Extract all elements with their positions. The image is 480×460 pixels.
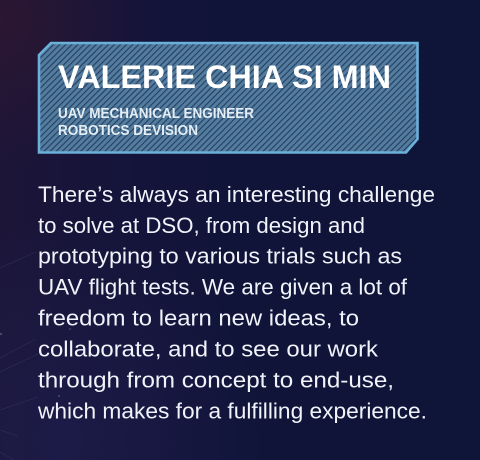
quote text: prototyping to various trials such as <box>38 244 402 268</box>
quote text: through from concept to end-use, <box>38 368 394 392</box>
quote text: to solve at DSO, from design and <box>38 213 365 238</box>
quote text: There’s always an interesting challenge <box>38 182 435 207</box>
panel background <box>39 43 418 152</box>
quote text: collaborate, and to see our work <box>38 336 379 362</box>
quote text: freedom to learn new ideas, to <box>38 306 359 330</box>
quote text <box>37 182 435 424</box>
quote text: UAV flight tests. We are given a lot of <box>38 274 408 300</box>
job title: UAV MECHANICAL ENGINEER <box>58 106 254 122</box>
name heading: VALERIE CHIA SI MIN <box>58 59 391 95</box>
quote text: which makes for a fulfilling experience. <box>37 398 427 424</box>
division: ROBOTICS DEVISION <box>58 123 198 139</box>
header panel <box>39 43 418 152</box>
